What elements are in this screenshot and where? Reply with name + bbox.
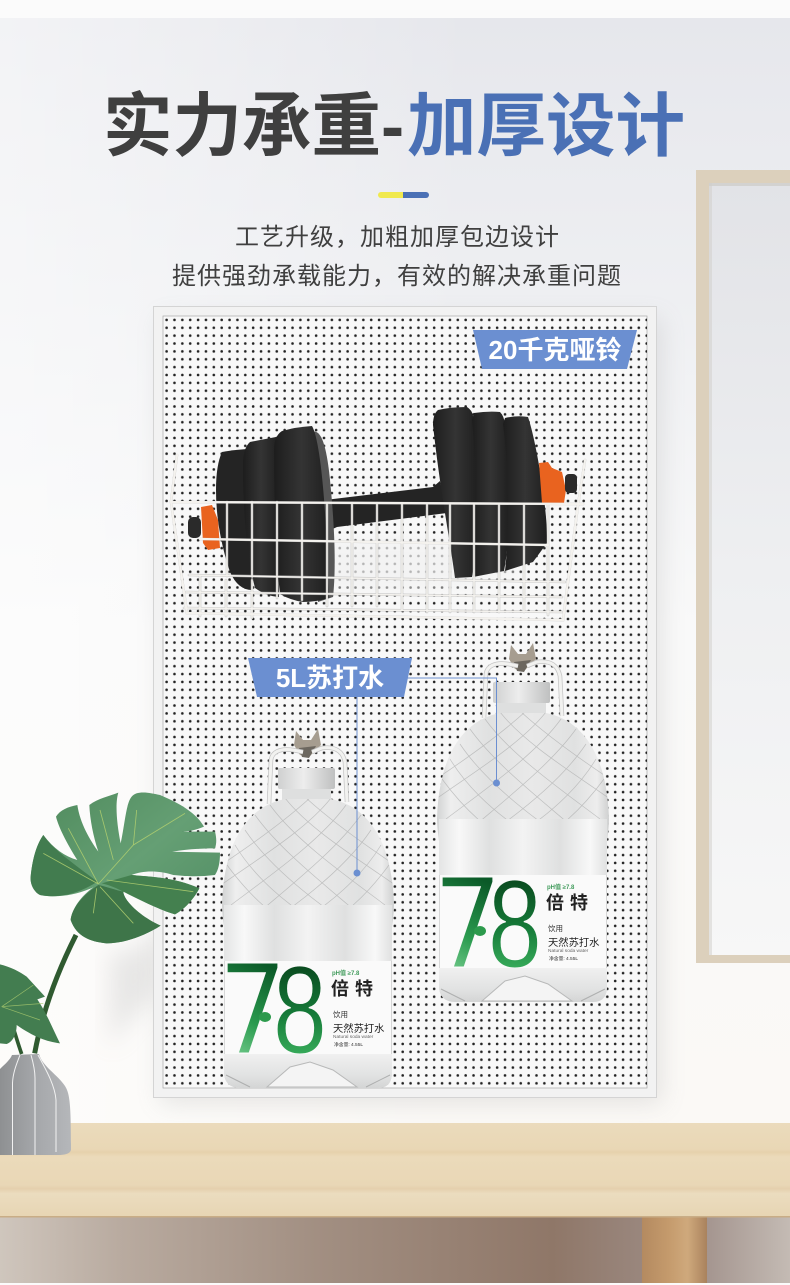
right plates bbox=[433, 407, 547, 578]
title bbox=[103, 87, 685, 165]
bottle right bbox=[433, 643, 610, 1002]
pegboard panel bbox=[153, 306, 657, 1098]
big number: 7 bbox=[218, 938, 287, 1083]
big number: 8 bbox=[488, 854, 542, 994]
vase bbox=[0, 1054, 71, 1155]
under table wall bbox=[0, 1218, 790, 1283]
callout: 5L soda water: 5L苏打水 bbox=[276, 663, 384, 693]
wooden picture frame bbox=[696, 170, 790, 963]
monstera plant bbox=[0, 792, 220, 1054]
bottle body bbox=[222, 799, 394, 1088]
bottle label: 净含量: 4.55L bbox=[549, 955, 578, 962]
wire highlight bbox=[171, 455, 585, 620]
pegboard shadow bbox=[160, 318, 662, 1104]
plant shadow bbox=[110, 925, 160, 1050]
leader lines bbox=[354, 678, 500, 876]
bottle label: pH值 ≥7.8 bbox=[547, 883, 575, 891]
hook bbox=[509, 643, 536, 672]
subtitle text bbox=[172, 224, 622, 290]
leaf veins bbox=[43, 810, 193, 923]
title: 加厚设计 bbox=[407, 87, 685, 165]
subtitle text: 工艺升级，加粗加厚包边设计 bbox=[235, 224, 560, 251]
bottle label: 天然苏打水 bbox=[548, 936, 600, 949]
handle bbox=[269, 748, 347, 804]
large leaf bbox=[31, 792, 220, 943]
bottle left bbox=[218, 729, 395, 1088]
big number: 7 bbox=[433, 852, 502, 997]
callout: 20kg dumbbell: 20千克哑铃 bbox=[489, 335, 621, 365]
wire basket bbox=[171, 455, 585, 620]
cap and neck bbox=[278, 768, 335, 800]
bottle diamond texture bbox=[438, 713, 608, 819]
dumbbell shadow bbox=[260, 539, 520, 591]
bottle label: 天然苏打水 bbox=[333, 1022, 385, 1035]
small leaf bbox=[0, 964, 60, 1044]
bottle label: 净含量: 4.55L bbox=[334, 1041, 363, 1048]
title divider bbox=[378, 192, 429, 198]
left orange collar bbox=[188, 505, 220, 550]
bottle label: 倍特 bbox=[546, 892, 594, 913]
table top bbox=[0, 1123, 790, 1218]
big number bbox=[218, 938, 327, 1083]
callout: 20kg dumbbell bbox=[473, 330, 637, 369]
left lobe shade bbox=[31, 835, 97, 896]
left plates bbox=[216, 426, 335, 602]
bottle base bbox=[439, 968, 607, 1002]
title: 实力承重- bbox=[103, 87, 404, 165]
right orange collar bbox=[539, 462, 577, 503]
cap and neck bbox=[493, 682, 550, 714]
bottle label: Natural soda water bbox=[333, 1034, 374, 1040]
bottle label: 倍特 bbox=[331, 978, 379, 999]
bottle label bbox=[218, 938, 391, 1083]
subtitle text: 提供强劲承载能力，有效的解决承重问题 bbox=[172, 263, 622, 290]
lower bottle band bbox=[224, 905, 392, 961]
callout: 5L soda water bbox=[248, 658, 500, 876]
small leaf veins bbox=[2, 985, 43, 1020]
lower lobe shade bbox=[71, 885, 161, 943]
bottle diamond texture bbox=[224, 799, 392, 905]
table leg bbox=[642, 1218, 707, 1283]
bar bbox=[325, 481, 447, 532]
bottle label: 饮用 bbox=[548, 923, 563, 933]
hook bbox=[294, 729, 321, 758]
big number bbox=[433, 852, 542, 997]
big number: 8 bbox=[273, 940, 327, 1080]
bottle label: 饮用 bbox=[333, 1009, 348, 1019]
handle bbox=[484, 662, 562, 718]
bottle label: Natural soda water bbox=[548, 948, 589, 954]
bottle body bbox=[437, 713, 609, 1002]
wire outline bbox=[171, 455, 585, 620]
small stem bbox=[7, 1010, 22, 1054]
bottle label: pH值 ≥7.8 bbox=[332, 969, 360, 977]
bottle label bbox=[433, 852, 606, 997]
dumbbell bbox=[188, 407, 577, 602]
lower bottle band bbox=[439, 819, 607, 875]
stem bbox=[35, 935, 76, 1053]
right lobe shade bbox=[102, 875, 199, 914]
bottle base bbox=[224, 1054, 392, 1088]
